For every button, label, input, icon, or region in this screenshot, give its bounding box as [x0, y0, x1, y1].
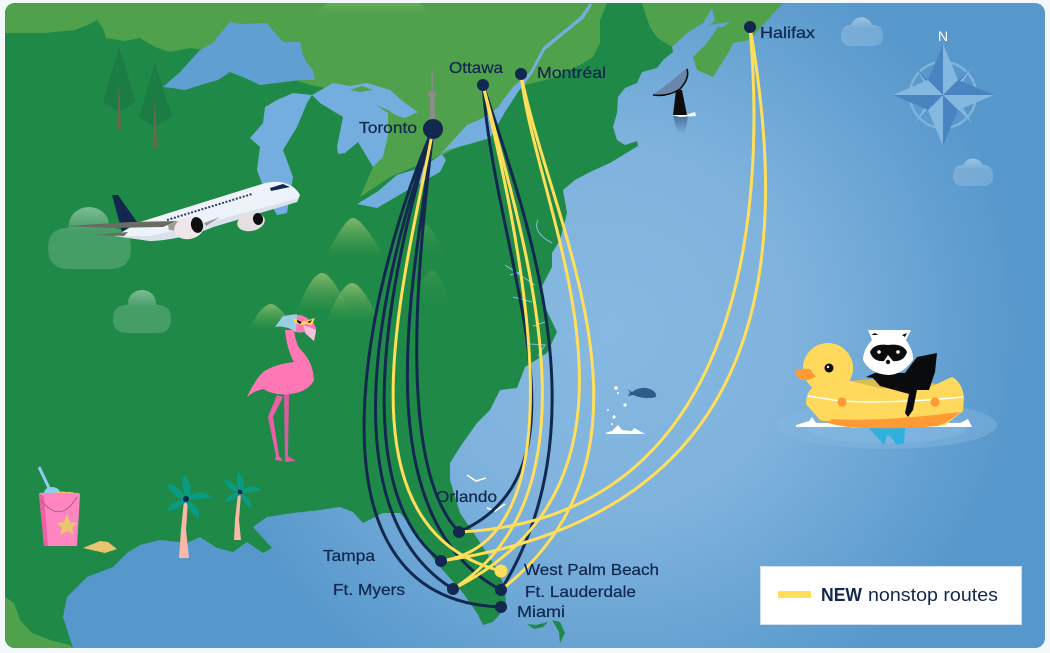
- icon: sand bucket: [39, 467, 80, 546]
- forest trees: [103, 47, 172, 147]
- cloud: right: [953, 159, 993, 186]
- routes: [364, 27, 766, 607]
- legend text: nonstop routes: [868, 585, 998, 605]
- icon: CN Tower: [428, 70, 436, 120]
- cloud: left large: [48, 207, 131, 269]
- lake: Ontario and St. Lawrence: [440, 3, 592, 155]
- new route: Ottawa to Tampa: [441, 85, 530, 561]
- icon: whale tail: [653, 68, 696, 134]
- label: Ft. Lauderdale: Ft. Lauderdale: [525, 584, 636, 601]
- label: Miami: Miami: [517, 604, 565, 621]
- label: Montréal: Montréal: [537, 65, 606, 82]
- route: Toronto to Miami: [364, 129, 501, 607]
- lake: Michigan: [250, 93, 312, 215]
- mountains: [248, 3, 450, 330]
- land: Mexico: [5, 597, 73, 648]
- land: Canada: [5, 3, 607, 197]
- icon: flamingo: [247, 314, 316, 462]
- lake: Superior: [163, 22, 315, 90]
- coastal inlets: [505, 220, 552, 356]
- label: Tampa: Tampa: [323, 548, 375, 565]
- icon: compass rose: [893, 44, 994, 146]
- icon: duck float with raccoon: [777, 330, 997, 449]
- icon: seagulls: [467, 475, 505, 511]
- route: Toronto to Orlando: [417, 129, 459, 532]
- icon: water splash: [605, 386, 645, 434]
- icon: airplane: [65, 182, 300, 242]
- route: Toronto to Ft. Lauderdale: [407, 129, 501, 590]
- city labels: [323, 25, 815, 621]
- route: Ottawa to Ft. Lauderdale: [483, 85, 552, 590]
- lake: Erie: [357, 154, 446, 208]
- cloud: left small: [113, 290, 171, 333]
- new route: Ottawa to Ft. Myers: [453, 85, 542, 589]
- icon: fish: [627, 388, 656, 398]
- label: Orlando: Orlando: [436, 489, 497, 506]
- icon: sand pile: [83, 541, 117, 553]
- new route: Montréal to Ft. Myers: [453, 74, 579, 589]
- city markers: [423, 21, 756, 613]
- label: Toronto: Toronto: [359, 120, 417, 137]
- lake: Huron: [312, 83, 418, 167]
- route: Ottawa to Orlando: [459, 85, 532, 532]
- label: Ft. Myers: Ft. Myers: [333, 582, 405, 599]
- compass north label: N: [938, 28, 948, 44]
- islands in Huron: [350, 86, 398, 117]
- land: United States: [5, 3, 673, 648]
- island: Bahamas keys: [527, 620, 565, 643]
- label: West Palm Beach: West Palm Beach: [524, 562, 659, 579]
- new route: Toronto to West Palm Beach: [393, 129, 501, 571]
- new route: Halifax to Orlando: [459, 27, 754, 532]
- label: Ottawa: Ottawa: [449, 60, 503, 77]
- cloud: top right: [841, 17, 883, 46]
- label: Halifax: Halifax: [760, 25, 815, 42]
- route: Toronto to Tampa: [384, 129, 441, 561]
- new route: Halifax to Tampa: [441, 27, 766, 561]
- legend text: NEW: [821, 585, 862, 605]
- icon: palm tree right: [224, 472, 261, 540]
- icon: palm tree left: [167, 475, 212, 558]
- legend swatch: [778, 591, 811, 598]
- land: Maritimes: [642, 3, 783, 77]
- new route: Montréal to Ft. Lauderdale: [501, 74, 594, 590]
- legend: [760, 566, 1022, 624]
- route: Toronto to Ft. Myers: [376, 129, 453, 589]
